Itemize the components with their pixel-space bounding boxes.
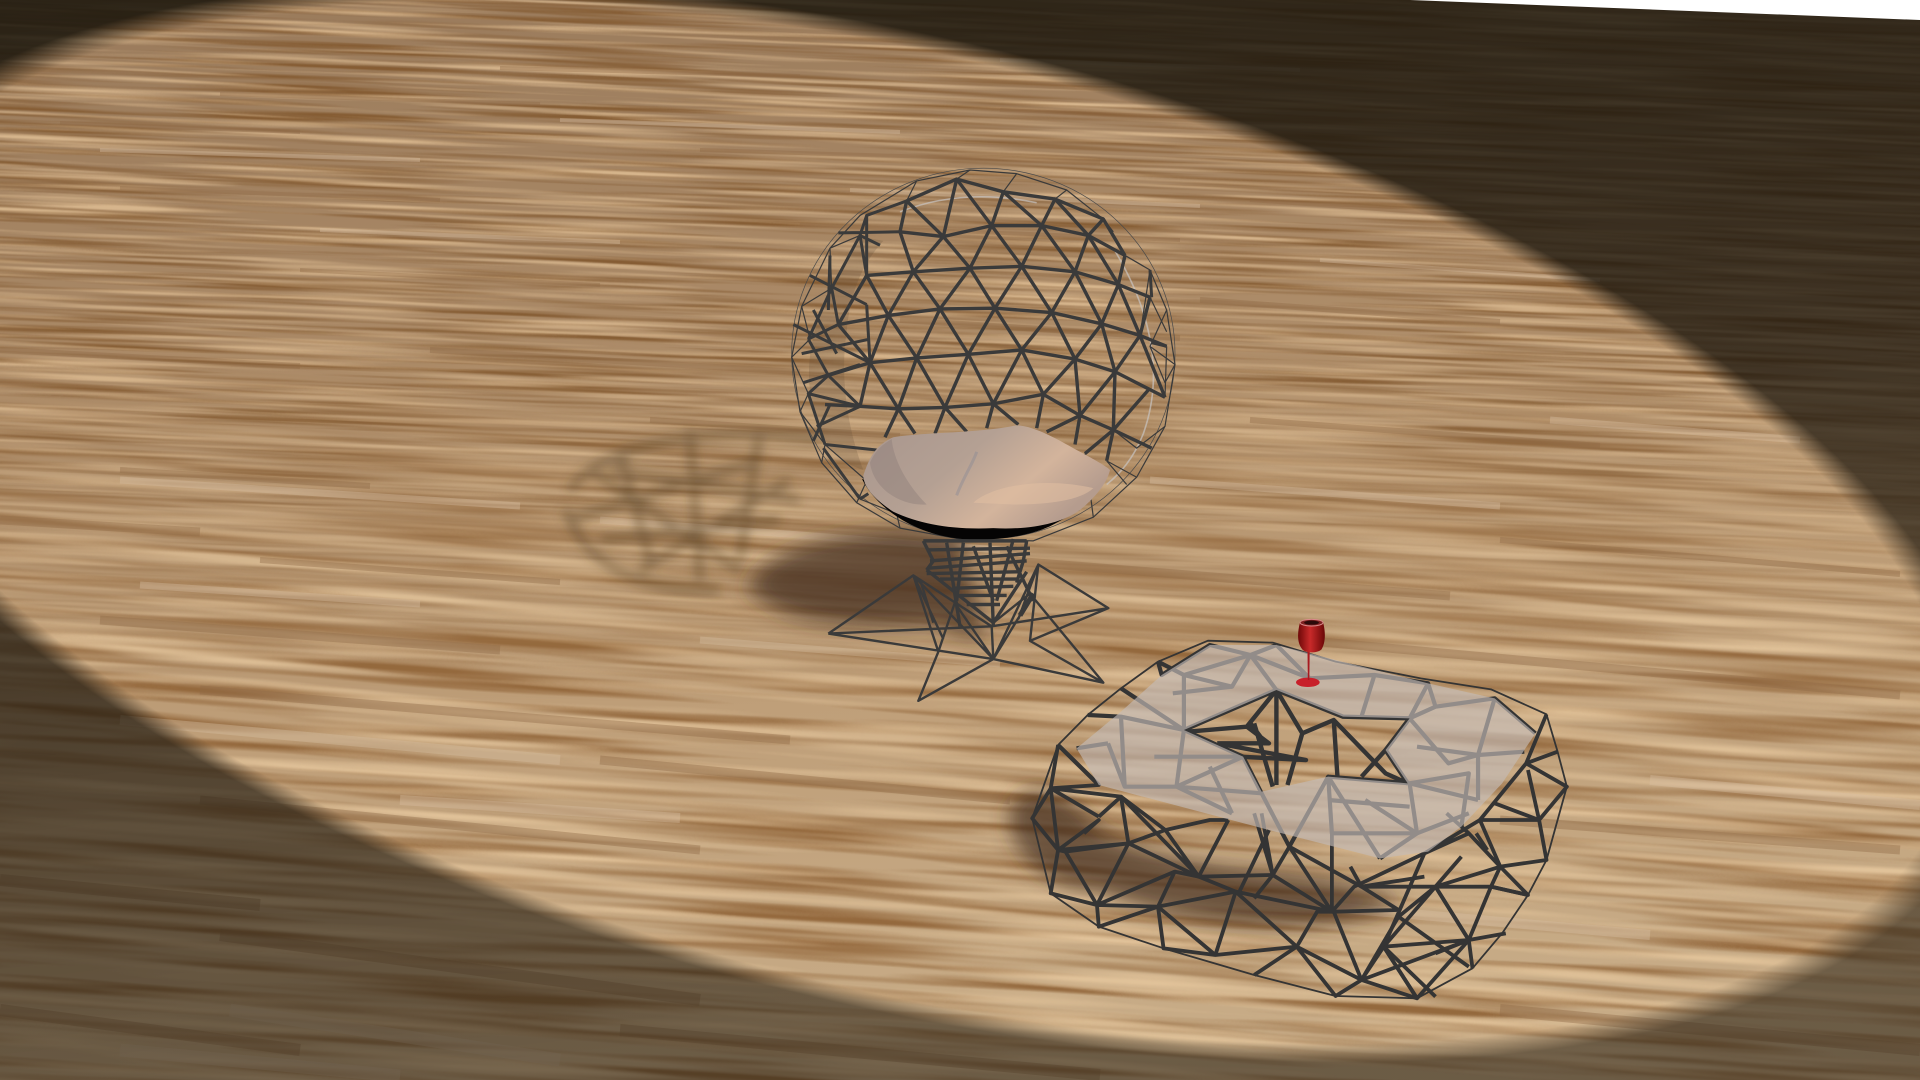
sphere far-edge thin struts xyxy=(792,170,1175,541)
star base xyxy=(828,565,1108,701)
pedestal xyxy=(923,539,1033,626)
table lower mesh xyxy=(1032,714,1567,998)
chair shadow xyxy=(565,430,985,640)
glass table top xyxy=(1077,645,1535,858)
cushion xyxy=(862,425,1110,540)
table inner hole struts xyxy=(1184,690,1410,787)
white background corner xyxy=(1410,0,1920,20)
table shadow xyxy=(1010,790,1400,925)
table upper mesh under the glass xyxy=(1058,645,1535,858)
table thin outer frame xyxy=(1032,641,1567,998)
sphere dense left side xyxy=(793,201,1167,499)
sphere inner shell xyxy=(792,168,1175,539)
wine glass xyxy=(1296,619,1325,687)
table xyxy=(1032,619,1567,998)
chair xyxy=(792,168,1175,701)
sphere triangular mesh xyxy=(825,179,1167,461)
